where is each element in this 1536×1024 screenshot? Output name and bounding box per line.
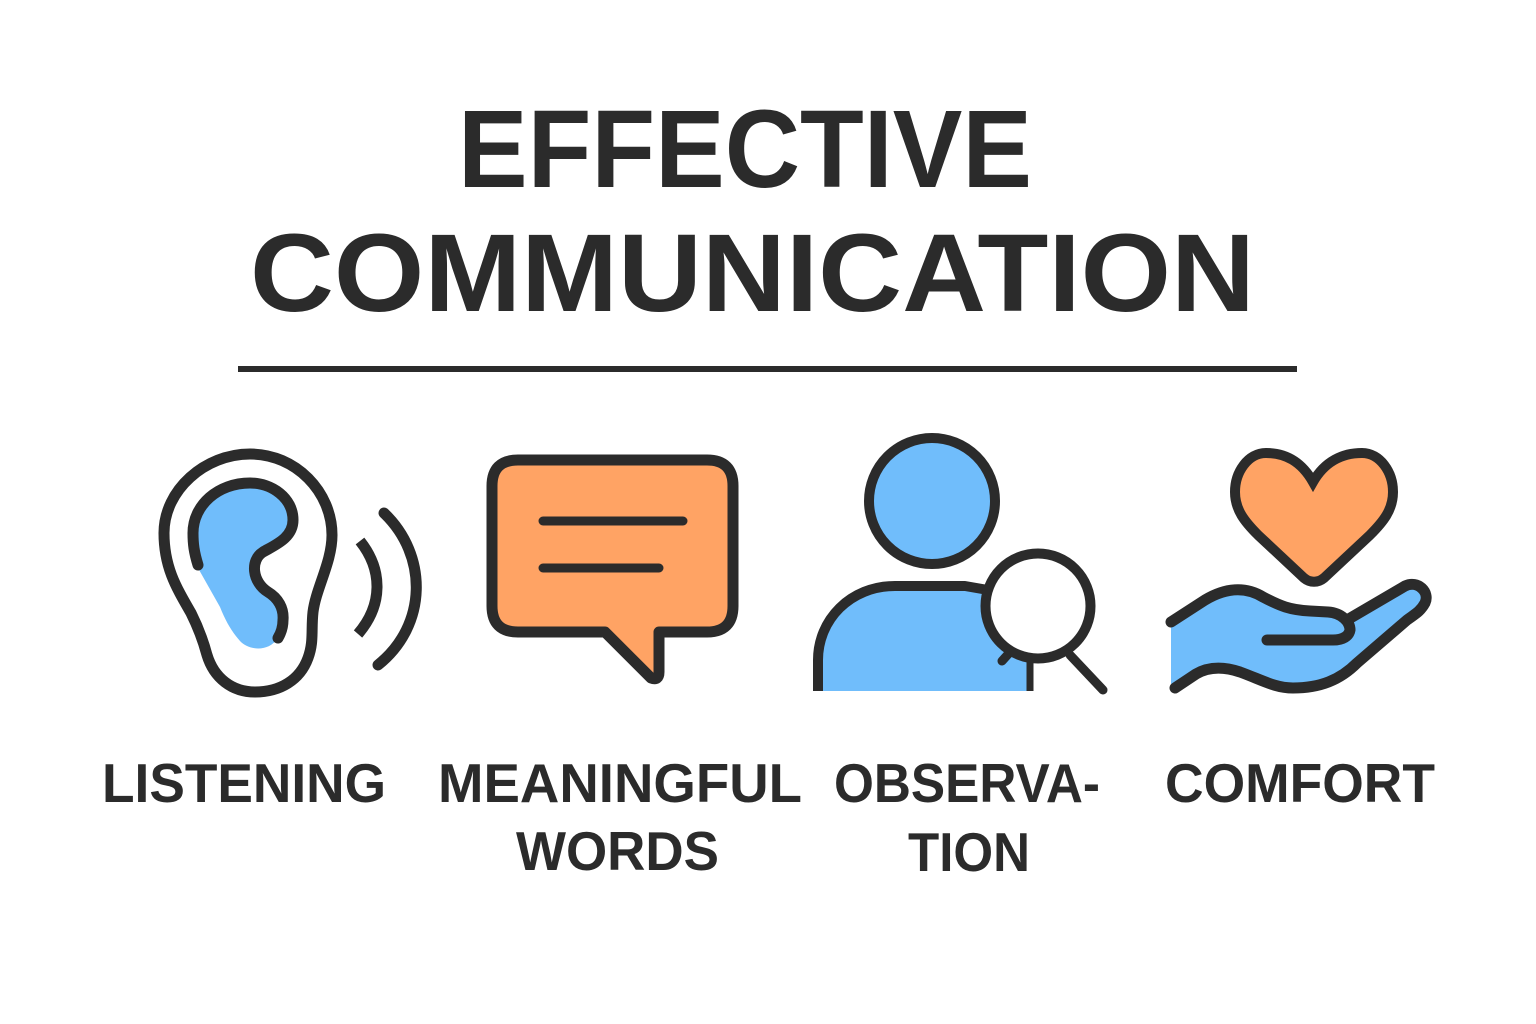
label: meaningful words xyxy=(438,752,802,882)
icon: speech bubble xyxy=(492,460,733,679)
label: listening: LISTENING xyxy=(102,752,386,814)
label: meaningful words: MEANINGFUL xyxy=(438,752,802,814)
icon: ear with sound waves xyxy=(164,454,416,692)
label: comfort: COMFORT xyxy=(1165,752,1435,814)
icon: person with magnifying glass xyxy=(818,438,1103,691)
label: observation: TION xyxy=(908,821,1030,883)
title xyxy=(250,88,1255,335)
icon: heart over open hand xyxy=(1171,453,1426,688)
label: meaningful words: WORDS xyxy=(516,820,719,882)
label: observation xyxy=(834,752,1100,883)
label: observation: OBSERVA- xyxy=(834,752,1100,814)
title: COMMUNICATION xyxy=(250,212,1255,335)
title: EFFECTIVE xyxy=(458,88,1032,211)
